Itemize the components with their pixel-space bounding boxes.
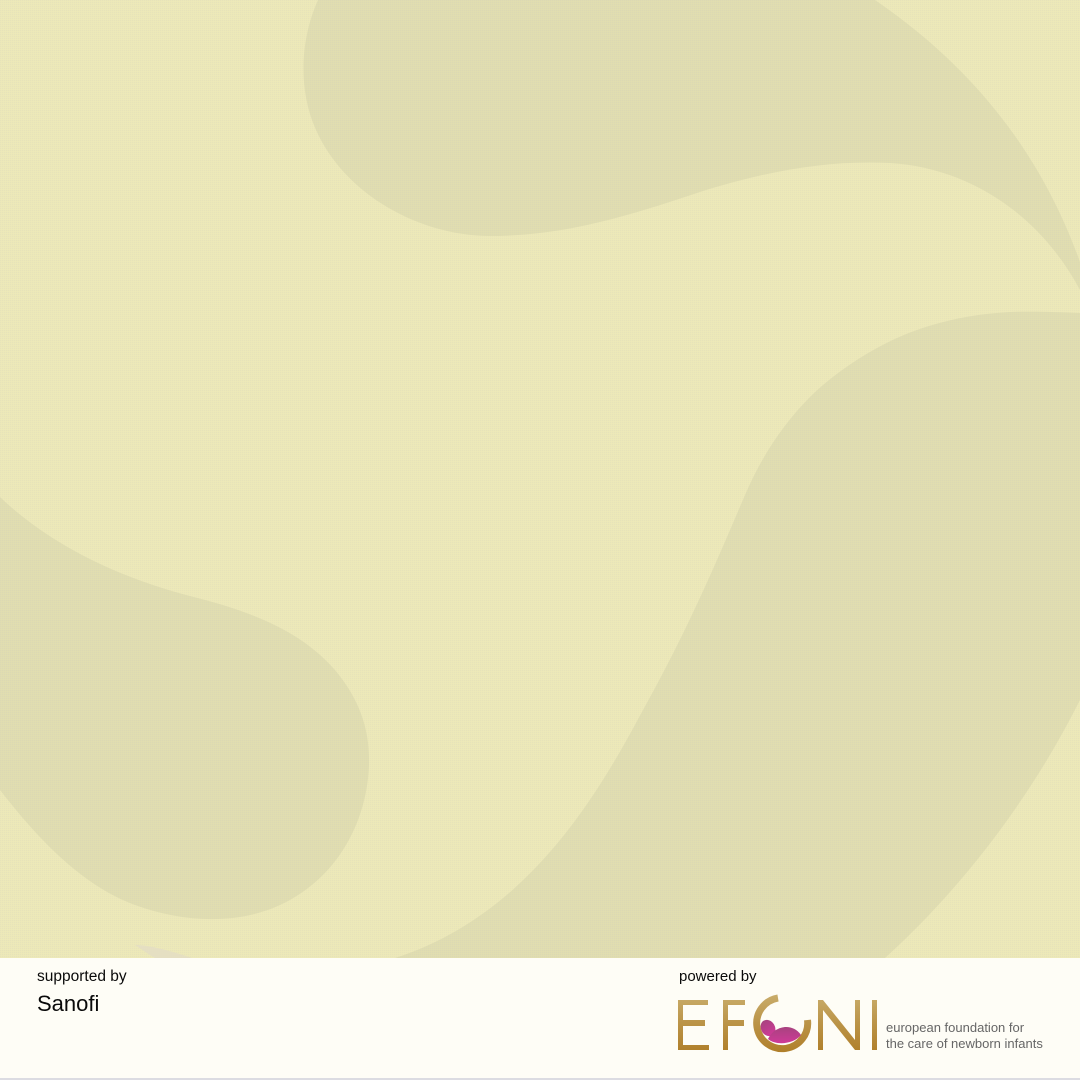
footer bottom line	[0, 1078, 1080, 1080]
logo letter F	[723, 1000, 745, 1050]
footer band	[0, 958, 1080, 1080]
logo baby head	[758, 1017, 778, 1039]
logo baby body	[768, 1027, 801, 1043]
logo letter E	[678, 1000, 709, 1050]
sponsor name: Sanofi	[37, 991, 99, 1016]
powered by label: powered by	[679, 968, 757, 985]
logo tagline	[886, 1020, 1043, 1051]
swirl: top	[303, 0, 1080, 290]
logo letter N	[818, 1000, 860, 1050]
swirl: left	[0, 497, 369, 919]
supported by label: supported by	[37, 968, 127, 985]
logo tagline: the care of newborn infants	[886, 1036, 1043, 1051]
logo letter C ring	[757, 998, 808, 1049]
logo letter I	[872, 1000, 877, 1050]
swirl: right	[395, 312, 1080, 958]
logo tagline: european foundation for	[886, 1020, 1025, 1035]
swirl: bottom sliver	[135, 945, 192, 958]
EFCNI logo	[678, 994, 1043, 1052]
